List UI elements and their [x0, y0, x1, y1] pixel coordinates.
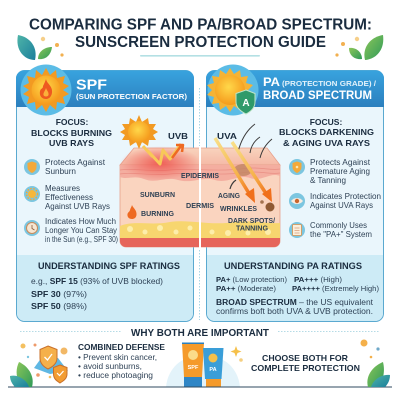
SPF ratings text: SPF 30 (97%)	[31, 289, 87, 299]
SPF ratings background	[17, 255, 193, 321]
fat layer	[120, 221, 280, 239]
PA bullet: premature aging	[289, 158, 371, 185]
SPF focus text	[31, 117, 112, 148]
SPF header band	[16, 70, 194, 107]
SPF bullet: time in the sun: Longer You Can Stay	[45, 226, 117, 235]
icon: leaves bottom right	[367, 362, 390, 387]
icon: sun with shield	[207, 64, 258, 116]
SPF focus text: FOCUS:	[56, 117, 88, 127]
skin labels: BURNING	[141, 211, 175, 218]
skin labels: EPIDERMIS	[181, 173, 219, 180]
title underline	[140, 55, 260, 57]
PA focus text: FOCUS:	[310, 117, 342, 127]
sunscreen tubes illustration	[166, 342, 243, 387]
icon: central sun	[120, 115, 158, 149]
icon: leaves bottom left	[10, 362, 33, 387]
combined defense text: COMBINED DEFENSE	[78, 342, 165, 352]
PA bullet: UVA protection	[289, 192, 381, 210]
icon: combined defense shields	[20, 344, 68, 383]
combined defense text: • reduce photoaging	[78, 371, 153, 380]
choose both text: COMPLETE PROTECTION	[251, 363, 360, 373]
choose both text: CHOOSE BOTH FOR	[262, 353, 348, 363]
PA bullet: UVA protection: Against UVA Rays	[310, 201, 373, 210]
skin labels: AGING	[218, 193, 241, 200]
SPF heading: SPF	[76, 76, 107, 94]
PA focus text: BLOCKS DARKENING	[279, 127, 374, 137]
skin body	[120, 165, 280, 247]
SPF ratings text	[31, 261, 180, 311]
combined defense text: • Prevent skin cancer,	[78, 353, 157, 362]
label: UVA: UVA	[217, 131, 237, 141]
SPF ratings text: SPF 50 (98%)	[31, 301, 87, 311]
PA heading: (PROTECTION GRADE) /	[282, 81, 376, 88]
skin cross-section diagram	[120, 146, 280, 249]
arrows: UVB rays	[143, 144, 183, 164]
SPF ratings text: UNDERSTANDING SPF RATINGS	[38, 261, 180, 271]
panel: PA	[206, 70, 384, 322]
PA focus text: & AGING UVA RAYS	[283, 138, 370, 148]
SPF bullet: protects against sunburn: Protects Against	[45, 158, 106, 167]
PA bullet: premature aging: & Tanning	[310, 176, 346, 185]
SPF bullet: measures effectiveness	[24, 184, 110, 211]
SPF bullet: measures effectiveness: Measures	[45, 184, 80, 193]
PA bullet: premature aging: Protects Against	[310, 158, 371, 167]
PA tube: PA	[209, 367, 217, 373]
combined defense text	[78, 342, 165, 380]
panel: SPF	[16, 70, 194, 322]
SPF focus text: UVB RAYS	[49, 138, 94, 148]
sparkles	[230, 346, 242, 357]
SPF subheading: (SUN PROTECTION FACTOR)	[76, 92, 188, 101]
centre divider	[199, 146, 201, 249]
PA heading: BROAD SPECTRUM	[263, 88, 372, 102]
icon: leaves top left	[17, 35, 64, 60]
SPF bullet: time in the sun	[24, 217, 118, 244]
sunburn glow	[120, 146, 200, 180]
skin labels: WRINKLES	[220, 206, 257, 213]
decorative dots right	[360, 340, 380, 358]
SPF bullet: time in the sun: in the Sun (e.g., SPF 30)	[45, 235, 118, 244]
epidermis layer	[120, 165, 280, 181]
SPF tube: SPF	[188, 365, 199, 371]
PA ratings text: PA+ (Low protection)	[216, 275, 288, 284]
icon: burning flame	[127, 205, 137, 219]
skin top surface	[120, 148, 280, 165]
PA ratings text: PA++ (Moderate)	[216, 284, 277, 293]
PA ratings background	[207, 255, 383, 321]
PA header band	[206, 70, 384, 107]
dotted heading rules	[20, 330, 380, 332]
SPF bullet: measures effectiveness: Against UVB Rays	[45, 202, 110, 211]
label: UVB: UVB	[168, 131, 188, 141]
title: SUNSCREEN PROTECTION GUIDE	[75, 34, 326, 51]
halo	[166, 355, 240, 387]
SPF bullet: measures effectiveness: Effectiveness	[45, 193, 93, 202]
PA ratings text: BROAD SPECTRUM – the US equivalent	[216, 298, 374, 307]
skin labels: DERMIS	[186, 203, 214, 210]
icon: leaves top right	[335, 35, 383, 60]
SPF bullet: time in the sun: Indicates How Much	[45, 217, 116, 226]
PA heading	[263, 77, 376, 102]
title: COMPARING SPF AND PA/BROAD SPECTRUM:	[29, 16, 372, 34]
PA ratings text: UNDERSTANDING PA RATINGS	[224, 261, 362, 271]
PA bullet: premature aging: Premature Aging	[310, 167, 370, 176]
fat globules	[127, 225, 271, 236]
brown pigment patch	[234, 164, 252, 176]
skin labels: TANNING	[236, 226, 269, 232]
choose both text	[251, 353, 360, 373]
PA ratings text: PA++++ (Extremely High)	[292, 284, 380, 293]
SPF ratings text: e.g., SPF 15 (93% of UVB blocked)	[31, 276, 163, 286]
epidermis lines	[120, 168, 280, 175]
PA bullet: PA+ system: Commonly Uses	[310, 221, 367, 230]
PA heading: PA	[263, 77, 280, 89]
PA ratings text	[216, 261, 380, 316]
SPF focus text: BLOCKS BURNING	[31, 128, 112, 138]
wrinkle mark	[230, 180, 236, 189]
dark spots	[260, 200, 274, 212]
icon: sun with shield: A	[242, 98, 250, 109]
dotted panel divider	[198, 88, 200, 320]
SPF bullet: protects against sunburn	[24, 158, 106, 176]
bottom red layer	[120, 238, 280, 247]
SPF bullet: protects against sunburn: Sunburn	[45, 167, 76, 176]
skin labels: DARK SPOTS/	[228, 218, 275, 225]
arrows: UVA rays	[215, 138, 272, 203]
footer line	[8, 386, 392, 388]
PA bullet: PA+ system	[289, 221, 372, 239]
skin labels	[140, 173, 275, 232]
skin labels: SUNBURN	[140, 192, 175, 199]
combined defense text: • avoid sunburns,	[78, 362, 142, 371]
PA ratings text: PA+++ (High)	[294, 275, 343, 284]
PA focus text	[279, 117, 374, 148]
title	[29, 16, 372, 51]
PA ratings text: confirms boft both UVA & UVB protection.	[216, 307, 373, 316]
heading: why both are important: WHY BOTH ARE IMPORTANT	[131, 328, 269, 339]
icon: sun with flame	[20, 64, 72, 116]
PA bullet: PA+ system: the "PA+" System	[310, 230, 372, 239]
PA bullet: UVA protection: Indicates Protection	[310, 192, 381, 201]
icon: hairs	[238, 124, 272, 158]
